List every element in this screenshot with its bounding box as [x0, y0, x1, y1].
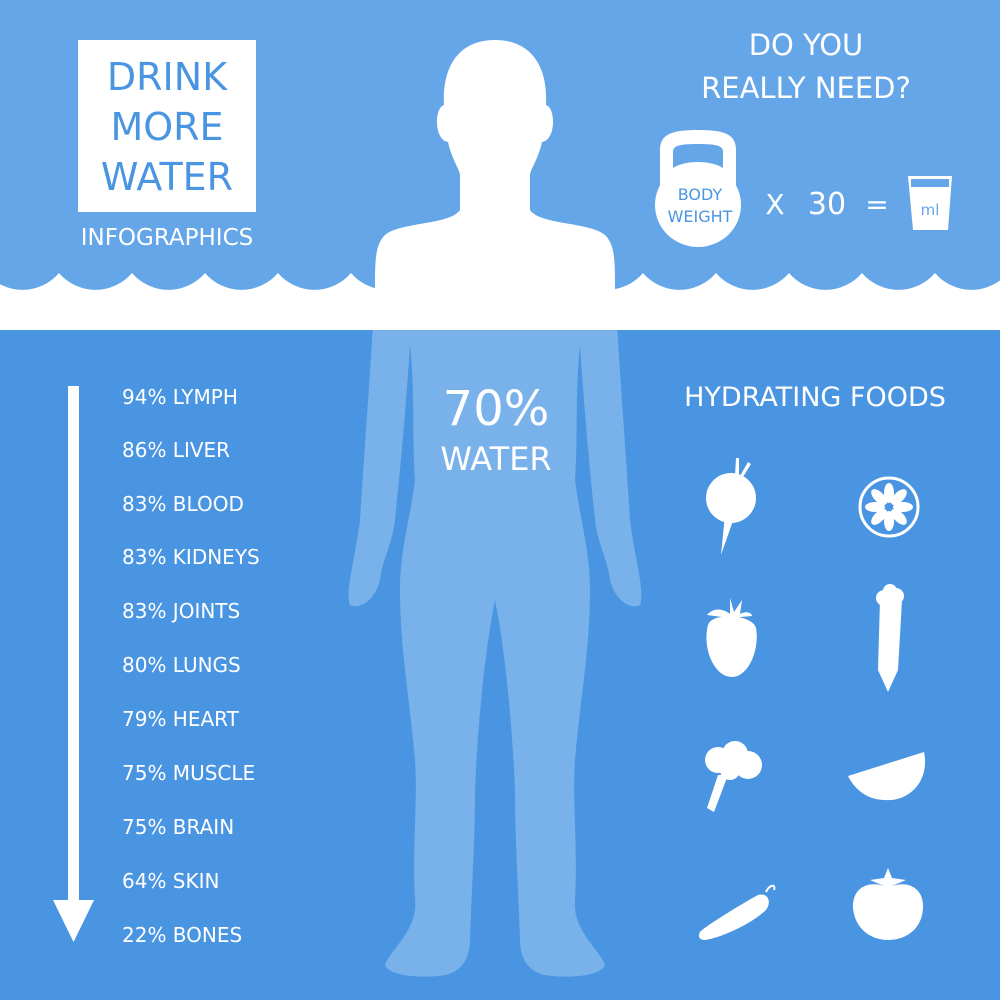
background bottom	[0, 330, 1000, 1000]
organ water list	[122, 385, 260, 947]
hydrating foods heading: HYDRATING FOODS	[684, 382, 946, 413]
formula: 30	[808, 187, 846, 222]
arrow	[53, 386, 94, 942]
icon: lemon	[860, 478, 918, 536]
icon: celery	[876, 584, 904, 692]
background top	[0, 0, 1000, 330]
formula: X	[765, 188, 785, 221]
question heading	[701, 28, 911, 105]
question heading: DO YOU	[749, 28, 863, 62]
icon: glass: ml	[921, 201, 939, 219]
subtitle: INFOGRAPHICS	[81, 225, 253, 251]
human silhouette	[349, 40, 641, 977]
organ water list: 75% MUSCLE	[122, 761, 255, 785]
icon: kettlebell: WEIGHT	[668, 207, 733, 226]
icon: kettlebell	[655, 130, 741, 247]
formula	[655, 130, 952, 247]
icon: watermelon	[848, 752, 925, 800]
question heading: REALLY NEED?	[701, 71, 911, 105]
formula: =	[865, 188, 889, 221]
title box: WATER	[101, 155, 233, 199]
title box	[78, 40, 256, 212]
organ water list: 83% BLOOD	[122, 492, 244, 516]
icon: broccoli	[705, 741, 762, 812]
body water percent	[440, 381, 552, 478]
title box: DRINK	[107, 55, 228, 99]
organ water list: 94% LYMPH	[122, 385, 238, 409]
organ water list: 22% BONES	[122, 923, 242, 947]
organ water list: 64% SKIN	[122, 869, 219, 893]
food icons	[699, 458, 925, 940]
icon: cucumber	[699, 886, 774, 940]
icon: beet	[706, 458, 756, 555]
organ water list: 83% KIDNEYS	[122, 545, 260, 569]
icon: kettlebell: BODY	[678, 185, 722, 204]
organ water list: 86% LIVER	[122, 438, 230, 462]
icon: glass	[908, 176, 952, 230]
wave band	[0, 273, 1000, 330]
title box: MORE	[110, 105, 224, 149]
organ water list: 75% BRAIN	[122, 815, 234, 839]
organ water list: 79% HEART	[122, 707, 240, 731]
body water percent: 70%	[443, 381, 549, 437]
icon: strawberry	[706, 598, 757, 677]
body water percent: WATER	[440, 440, 552, 478]
organ water list: 83% JOINTS	[122, 599, 240, 623]
icon: tomato	[853, 868, 923, 940]
organ water list: 80% LUNGS	[122, 653, 241, 677]
